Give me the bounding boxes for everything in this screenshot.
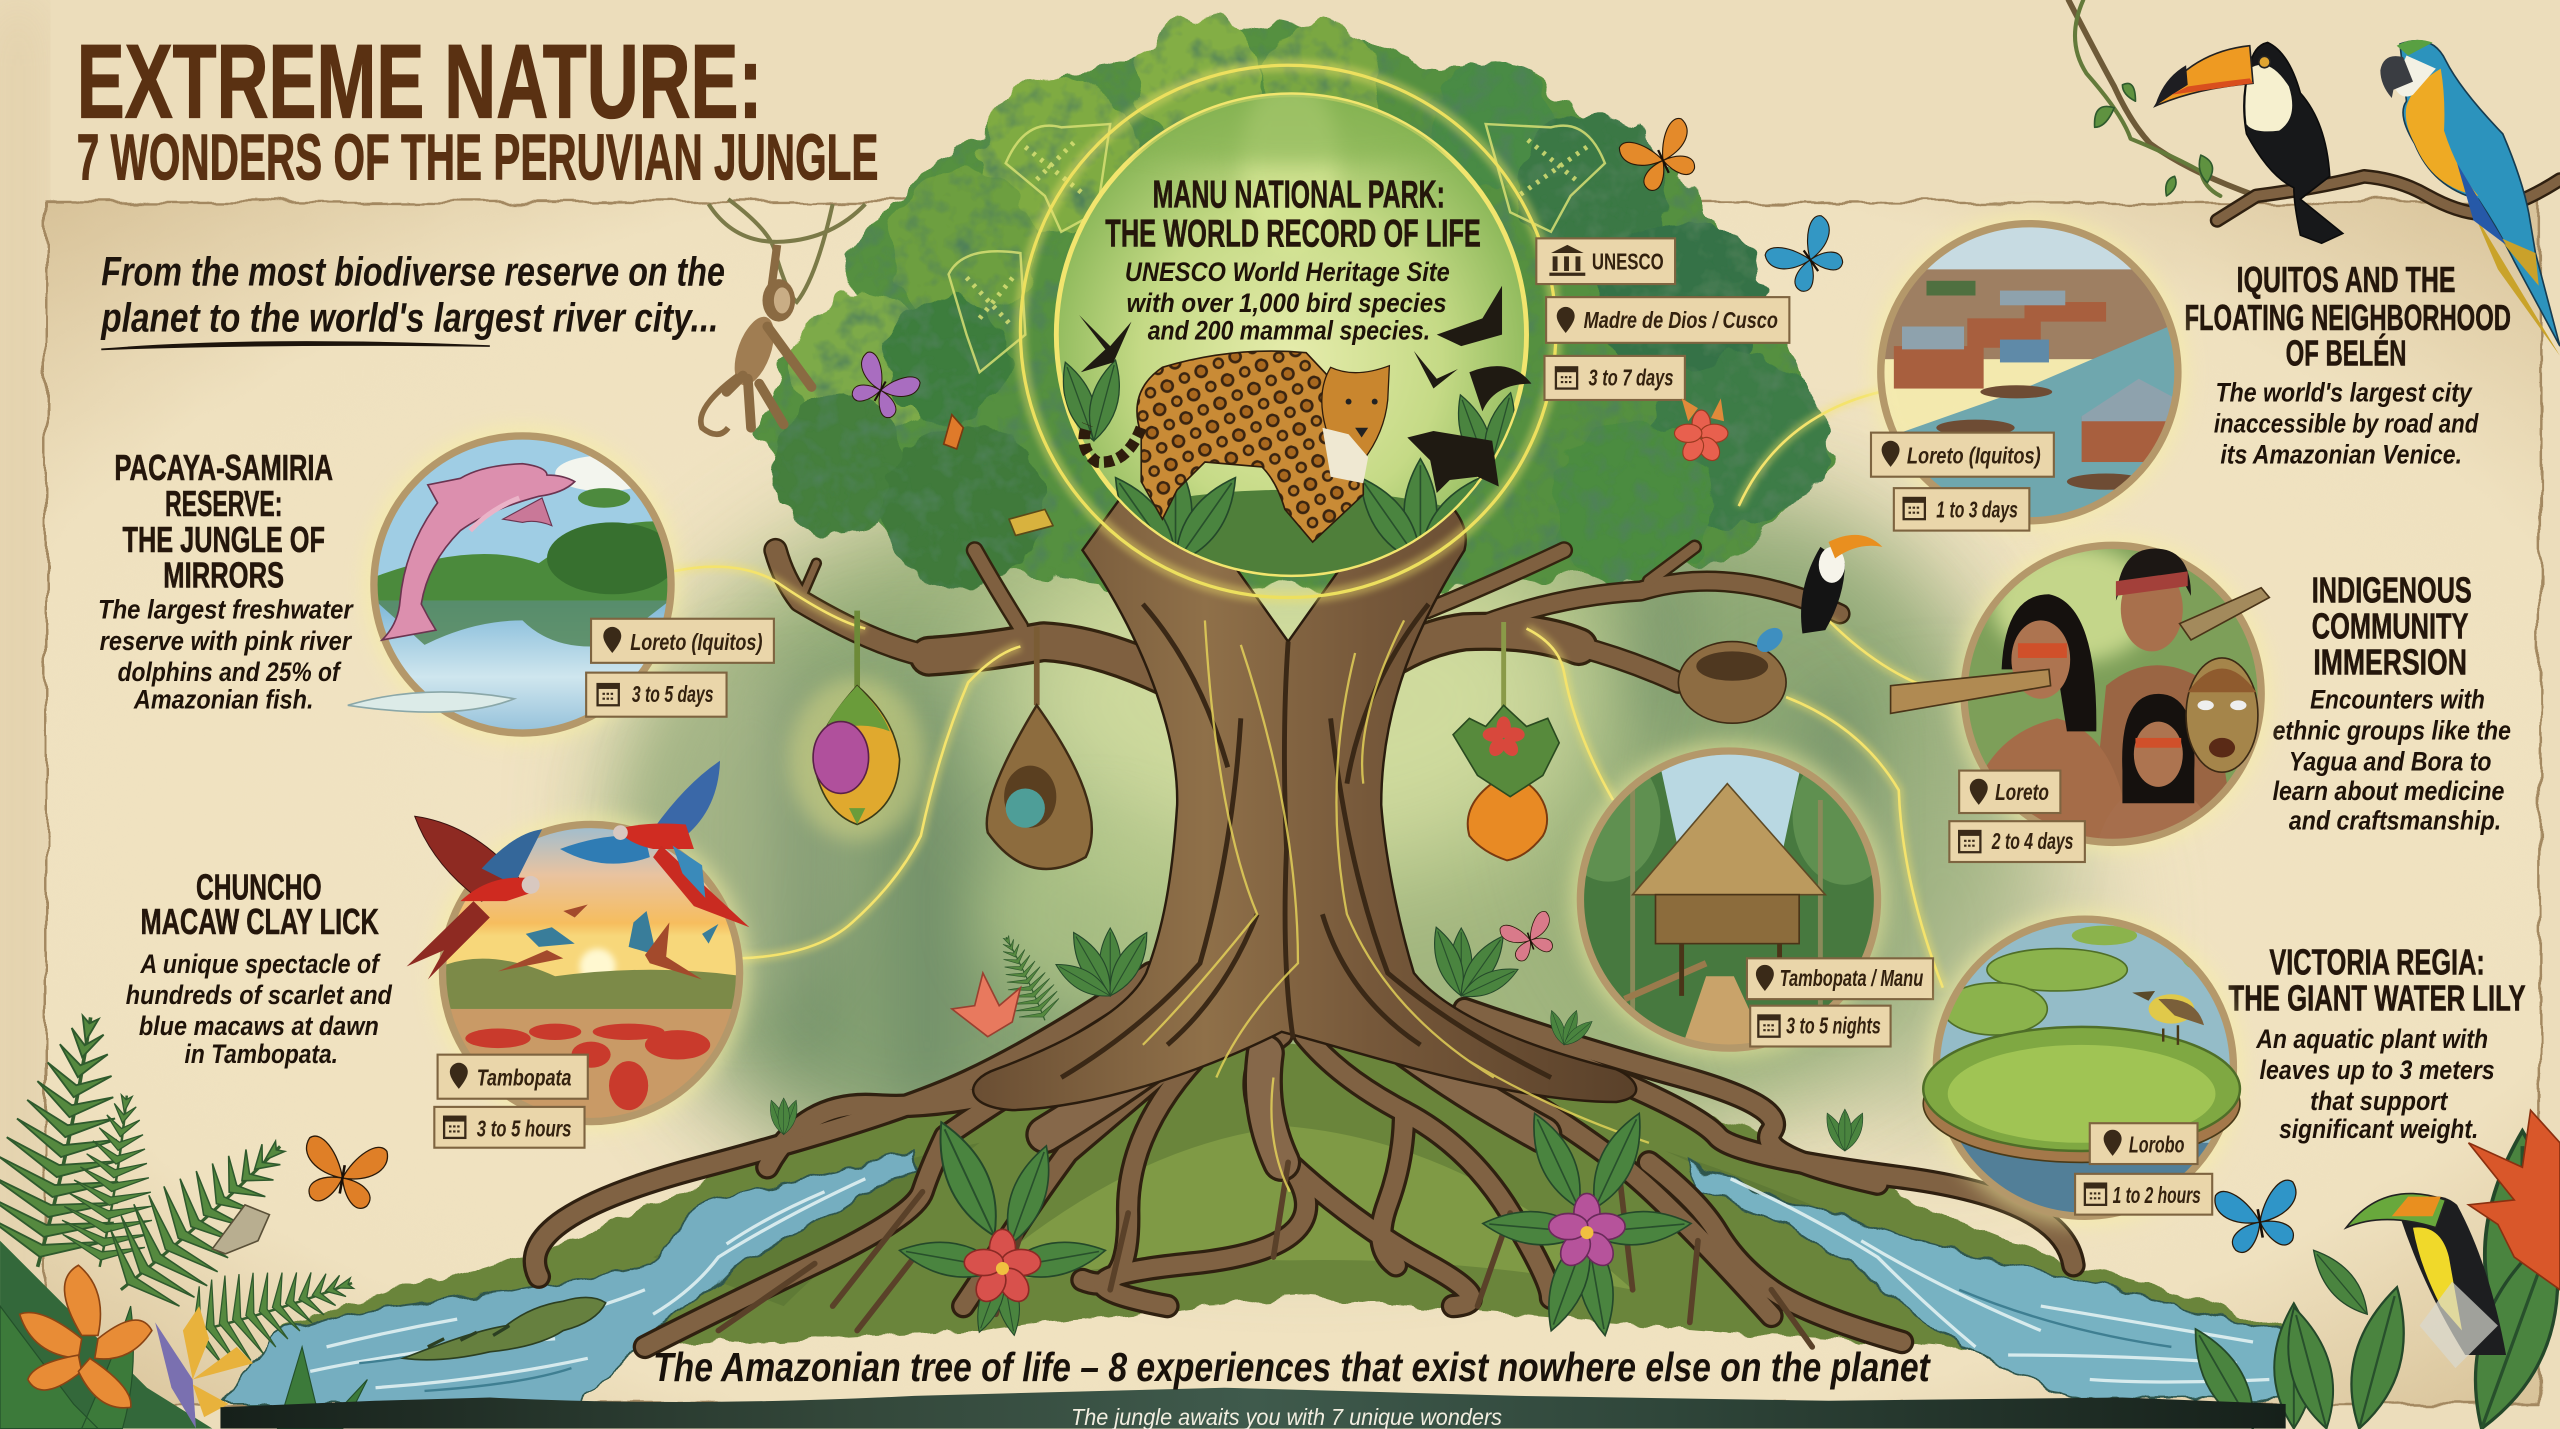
mask — [2186, 658, 2258, 772]
panel: treehouse lodge — [1556, 741, 1933, 1061]
medallion description: UNESCO World Heritage Site — [1125, 257, 1450, 287]
heading — [2184, 259, 2511, 374]
animal silhouettes — [1079, 286, 1531, 493]
tag: 3 to 5 nights: 3 to 5 nights — [1786, 1012, 1881, 1038]
tag: 3 to 5 hours — [434, 1107, 585, 1148]
river right — [1690, 1162, 2310, 1399]
butterflies — [298, 116, 2305, 1256]
girl — [2122, 694, 2194, 803]
red macaw right — [560, 761, 749, 927]
trunk — [973, 490, 1649, 1192]
heading: RESERVE: — [165, 483, 282, 524]
tag: Madre de Dios — [1546, 297, 1789, 343]
tag: Loreto: Loreto — [1995, 779, 2049, 805]
intro text: From the most biodiverse reserve on the — [101, 249, 725, 295]
heading: INDIGENOUS — [2312, 569, 2472, 610]
description — [126, 949, 392, 1069]
medallion: sunset macaws — [407, 761, 749, 1131]
red macaw left — [407, 816, 542, 980]
flowers at tree base — [897, 1107, 1692, 1338]
description: ethnic groups like the — [2273, 716, 2511, 746]
nest pod — [987, 705, 1092, 869]
description: The world's largest city — [2215, 378, 2474, 408]
title — [77, 24, 878, 194]
tag: Loreto — [1959, 771, 2060, 813]
monkey hanging on vine — [701, 199, 865, 434]
tag: Lorobo — [2090, 1123, 2198, 1164]
wading bird — [2132, 991, 2204, 1045]
heading: OF BELÉN — [2286, 333, 2406, 374]
description: An aquatic plant with — [2255, 1024, 2488, 1054]
splash — [348, 692, 514, 712]
footer tagline: The Amazonian tree of life – 8 experiences that exist nowhere else on the planet — [653, 1344, 1931, 1390]
heading — [140, 867, 379, 942]
plants beside the trunk — [766, 923, 1868, 1154]
description: A unique spectacle of — [140, 949, 381, 979]
description: significant weight. — [2279, 1114, 2478, 1144]
title: 7 WONDERS OF THE PERUVIAN JUNGLE — [77, 121, 878, 194]
heading: COMMUNITY — [2312, 605, 2469, 646]
panel: Iquitos and Belen — [1871, 214, 2511, 531]
flute — [1891, 669, 2051, 713]
river left with crocodile — [220, 1153, 918, 1404]
description: that support — [2310, 1086, 2448, 1116]
medallion description: with over 1,000 bird species — [1127, 288, 1447, 318]
hanging fruit and nests — [789, 535, 1882, 869]
tag: Loreto (Iquitos): Loreto (Iquitos) — [1907, 443, 2041, 469]
tag: Loreto (Iquitos) — [1871, 433, 2054, 477]
jaguar — [1084, 351, 1389, 542]
heading: IQUITOS AND THE — [2237, 259, 2455, 300]
title: EXTREME NATURE: — [77, 24, 762, 141]
crocodile — [403, 1297, 606, 1360]
medallion: treehouse — [1556, 748, 1897, 1061]
medallion: water lily — [1923, 909, 2243, 1226]
tag: 2 to 4 days: 2 to 4 days — [1991, 828, 2073, 854]
description: reserve with pink river — [100, 626, 352, 656]
ground mound with grass — [274, 1045, 2310, 1355]
toucan bottom — [2346, 1194, 2506, 1355]
tag: 3 to 5 hours: 3 to 5 hours — [477, 1115, 571, 1141]
bird nest — [1678, 623, 1787, 723]
description: inaccessible by road and — [2214, 409, 2479, 439]
description: Yagua and Bora to — [2289, 747, 2491, 777]
heading — [2312, 569, 2472, 682]
branches — [776, 509, 1840, 694]
roots — [535, 973, 2073, 1347]
tag: 1 to 3 days — [1894, 488, 2029, 531]
panel: Pacaya-Samiria — [98, 426, 774, 743]
description — [98, 595, 354, 715]
tag: Loreto (Iquitos): Loreto (Iquitos) — [630, 629, 762, 655]
pipe — [2180, 588, 2269, 640]
tag: Tambopata / Manu — [1747, 958, 1933, 999]
man — [2116, 549, 2191, 651]
description: learn about medicine — [2273, 776, 2504, 806]
toucan top — [2155, 42, 2343, 243]
tag: 2 to 4 days — [1949, 821, 2085, 862]
undergrowth — [1045, 65, 1535, 637]
description: leaves up to 3 meters — [2260, 1055, 2495, 1085]
pod — [813, 686, 900, 824]
macaw top — [2380, 40, 2560, 356]
tag: 3 to 7 days: 3 to 7 days — [1589, 364, 1673, 390]
heading — [2229, 942, 2526, 1019]
bud — [212, 1205, 269, 1254]
description: and craftsmanship. — [2289, 805, 2501, 835]
tag: Tambopata — [438, 1055, 588, 1099]
medallion heading: MANU NATIONAL PARK: — [1153, 173, 1445, 216]
panel: Chuncho clay lick — [126, 761, 749, 1148]
foliage bottom right with toucan — [2180, 1110, 2560, 1429]
bird of paradise — [155, 1306, 253, 1429]
heliconia — [2469, 1110, 2560, 1290]
heading — [114, 447, 333, 596]
description: Amazonian fish. — [133, 685, 314, 715]
medallion description: and 200 mammal species. — [1148, 316, 1430, 346]
medallion: lake and pink dolphin — [348, 426, 681, 743]
tag: Loreto (Iquitos) — [591, 619, 774, 663]
heading: THE JUNGLE OF — [122, 519, 325, 560]
tag: Lorobo: Lorobo — [2129, 1132, 2184, 1158]
medallion heading — [1105, 173, 1481, 256]
heading: IMMERSION — [2313, 641, 2467, 682]
canopy foliage — [762, 20, 1833, 588]
small toucan — [1801, 535, 1882, 633]
tag: 1 to 3 days: 1 to 3 days — [1936, 497, 2018, 523]
tag: 3 to 5 days — [586, 673, 727, 717]
orange fruit — [1453, 705, 1559, 860]
top-right branch with vines — [2069, 0, 2560, 220]
medallion: people — [1891, 535, 2271, 852]
tag: 1 to 2 hours — [2075, 1174, 2212, 1215]
panel: Victoria Regia — [1923, 909, 2526, 1226]
intro text: planet to the world's largest river city... — [100, 294, 718, 340]
tag: 1 to 2 hours: 1 to 2 hours — [2113, 1182, 2201, 1208]
heading: MIRRORS — [163, 555, 284, 596]
glowing connector lines — [673, 392, 1967, 988]
heading: PACAYA-SAMIRIA — [114, 447, 333, 488]
description — [2214, 378, 2479, 470]
bottom jungle strip — [220, 1388, 2286, 1429]
blurred jungle backdrop — [620, 424, 2090, 1208]
intro text — [100, 249, 725, 349]
panel: Manu National Park medallion — [1020, 65, 1556, 637]
tag: Madre de Dios: Madre de Dios / Cusco — [1584, 307, 1778, 333]
description: its Amazonian Venice. — [2220, 440, 2462, 470]
tag: UNESCO — [1536, 238, 1675, 284]
tag: Tambopata / Manu: Tambopata / Manu — [1780, 965, 1923, 991]
tree of life — [535, 20, 2073, 1347]
description: Encounters with — [2310, 685, 2485, 715]
description — [2255, 1024, 2495, 1144]
tag: 3 to 5 nights — [1750, 1006, 1891, 1046]
medallion heading: THE WORLD RECORD OF LIFE — [1105, 213, 1481, 256]
description — [2273, 685, 2511, 835]
foliage bottom left — [0, 1004, 367, 1429]
heading: CHUNCHO — [196, 867, 322, 908]
tag: Tambopata: Tambopata — [477, 1065, 572, 1091]
dolphin — [382, 464, 575, 640]
tag: UNESCO: UNESCO — [1592, 248, 1664, 274]
description: dolphins and 25% of — [118, 657, 342, 687]
tag: 3 to 7 days — [1544, 356, 1685, 400]
tag: 3 to 5 days: 3 to 5 days — [632, 681, 713, 707]
description: in Tambopata. — [185, 1039, 338, 1069]
medallion description — [1125, 257, 1450, 346]
description: The largest freshwater — [98, 595, 354, 625]
medallion: floating city — [1871, 214, 2188, 531]
orange flower — [20, 1265, 152, 1408]
woman with flute — [2002, 594, 2096, 731]
panel: Indigenous community — [1891, 535, 2511, 862]
heading: MACAW CLAY LICK — [140, 901, 379, 942]
description: hundreds of scarlet and — [126, 980, 392, 1010]
glowing jaguar motifs in canopy — [949, 124, 1605, 372]
description: blue macaws at dawn — [139, 1011, 379, 1041]
